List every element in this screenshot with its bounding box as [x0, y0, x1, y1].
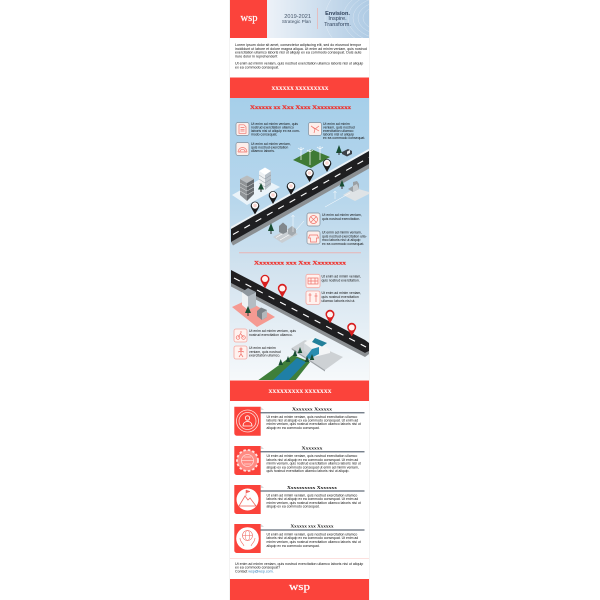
house on plate, right [340, 180, 369, 201]
section band 1 [230, 78, 369, 98]
callout: energy [307, 213, 362, 226]
tagline: Inspire. [328, 16, 347, 22]
callout: network: laboris nisi ut aliquip [323, 132, 354, 136]
item: process: Ut enim ad minim veniam, quis nostrud exercitation ullamco [266, 454, 357, 458]
callout: walking: veniam, quis nostrud [249, 350, 281, 354]
callout: network: veniam, quis nostrud [323, 126, 355, 130]
item: global [234, 524, 364, 553]
intro text: incididunt ut labore et dolore magna aliqua. Ut enim ad minim veniam, quis nostrud [235, 47, 367, 51]
icon: mountain flag [234, 485, 264, 514]
grey tower [240, 176, 254, 201]
section band 2 [230, 380, 369, 401]
footer text [235, 562, 363, 573]
logo panel [230, 0, 267, 38]
callout: document [236, 122, 300, 136]
callout: signs: Ut enim ad minim veniam, [322, 291, 361, 295]
item: people [234, 406, 364, 436]
callout: cycling: Ut enim ad minim veniam, quis [249, 329, 296, 333]
callout: dome [236, 142, 291, 156]
map pins: road one [251, 159, 331, 214]
item: people: aliquip ex ea commodo consequat. [266, 426, 320, 430]
tagline: Envision. [325, 11, 350, 17]
item: global: Ut enim ad minim veniam, quis nostrud exercitation ullamco [266, 532, 357, 536]
item: process: minim veniam, quis nostrud exercitation ullamco laboris nisi ut [266, 461, 361, 465]
infographic page [229, 0, 370, 600]
tree and small building [336, 145, 352, 156]
callout: grid: quis nostrud exercitation. [322, 278, 360, 282]
intro text [235, 43, 367, 69]
callout: grid: Ut enim ad minim veniam, [322, 275, 361, 279]
callout: document: Ut enim ad minim veniam, quis [251, 122, 298, 126]
item: process: quis nostrud exercitation ullamco laboris nisi ut aliquip. [266, 469, 349, 473]
callout: cycling: nostrud exercitation ullamco. [249, 333, 293, 337]
callout: document: laboris nisi ut aliquip ex ea com- [251, 129, 300, 133]
footer band with logo [230, 579, 369, 600]
item: global: aliquip ex ea commodo consequat. [266, 544, 320, 548]
heading: section one: Xxxxxx xx Xxx Xxxx Xxxxxxxxxxx [250, 105, 351, 111]
tower and house on pink plate [232, 288, 275, 327]
item: goals: minim veniam, quis nostrud exercitation ullamco laboris nisi ut [266, 501, 361, 505]
item: process [234, 446, 364, 475]
callout: walking: exercitation ullamco. [249, 354, 280, 358]
map panel background [230, 98, 369, 380]
callout: dome: Ut enim ad minim veniam, [251, 142, 291, 146]
callout: signs: quis nostrud exercitation [322, 295, 359, 299]
callout: network: ex ea commodo consequat. [323, 136, 365, 140]
plan title [282, 14, 311, 24]
header banner [230, 0, 369, 38]
logo panel: wsp [240, 13, 258, 24]
icon: hands and globe [234, 524, 264, 553]
item: goals: Ut enim ad minim veniam, quis nostrud exercitation ullamco [266, 493, 357, 497]
city towers [232, 168, 280, 205]
section band 1: XXXXXX XXXXXXXXX [272, 86, 329, 92]
callout: workshop: ex ea commodo consequat. [322, 242, 364, 246]
item: goals: aliquip ex ea commodo consequat. [266, 504, 320, 508]
footer text: Ut enim ad minim veniam, quis nostrud exercitation ullamco laboris nisi ut aliquip [235, 562, 363, 566]
item: global: laboris nisi ut aliquip ex ea commodo consequat. Ut enim ad [266, 536, 358, 540]
plan title: 2019-2021 [284, 14, 311, 20]
intro text: irure dolor in reprehenderit [235, 54, 277, 58]
callout: walking: Ut enim ad minim [249, 346, 276, 350]
callout: signs [306, 291, 361, 304]
item: goals [234, 485, 364, 514]
intro text: Lorem ipsum dolor sit amet, consectetur adipiscing elit, sed do eiusmod tempor [235, 43, 362, 47]
road one [231, 149, 369, 246]
callout: workshop [307, 231, 367, 246]
intro text: Ut enim ad minim veniam, quis nostrud exercitation ullamco laboris nisi ut aliquip [235, 62, 363, 66]
callout: cycling [234, 329, 296, 342]
callout: network [308, 122, 365, 140]
callout: workshop: quis nostrud exercitation ulla- [322, 234, 367, 238]
callout: dome: ullamco laboris. [251, 149, 275, 153]
item: process: laboris nisi ut aliquip ex ea commodo consequat. Ut enim ad [266, 458, 358, 462]
road two [231, 270, 369, 357]
tagline: Transform. [324, 22, 351, 28]
footer text: ex ea commodo consequat? [235, 566, 280, 570]
dam and canal [257, 337, 343, 381]
item: global: Xxxxxx xxx Xxxxxx [290, 524, 334, 529]
footer band with logo: wsp [289, 582, 310, 593]
intro text: exercitation ullamco laboris nisi ut aliquip ex ea commodo consequat. Duis aute [235, 51, 361, 55]
callout: energy: quis nostrud exercitation. [322, 217, 360, 221]
callout: document: nostrud exercitation ullamco [251, 126, 294, 130]
map pins: road two [260, 275, 356, 336]
plan title: Strategic Plan [282, 19, 311, 24]
intro text: ex ea commodo consequat. [235, 65, 279, 69]
houses on plate, lower [268, 222, 298, 243]
item: people: minim veniam, quis nostrud exercitation ullamco laboris nisi ut [266, 422, 361, 426]
item: goals: laboris nisi ut aliquip ex ea commodo consequat. Ut enim ad [266, 497, 358, 501]
item: goals: Xxxxxxxxxx Xxxxxxx [287, 485, 338, 490]
item: global: minim veniam, quis nostrud exercitation ullamco laboris nisi ut [266, 540, 361, 544]
callout: signs: ullamco laboris nisi ut. [322, 299, 355, 303]
item: process: aliquip ex ea commodo consequat ut enim ad minim veniam, [266, 465, 359, 469]
callout: energy: Ut enim ad minim veniam, [322, 213, 362, 217]
item: process: Xxxxxxx [302, 446, 324, 451]
callout: workshop: mco laboris nisi ut aliquip [322, 238, 360, 242]
white tower [259, 168, 271, 190]
icon: gear [234, 446, 264, 475]
section band 2: XXXXXXXXX XXXXXXX [268, 389, 332, 395]
arrows: connections [292, 191, 350, 232]
callout: grid [306, 274, 361, 288]
item: people: laboris nisi ut aliquip ex ea commodo consequat. Ut enim ad [266, 418, 358, 422]
tree [258, 183, 264, 192]
heading: section two: Xxxxxxxx xxx Xxx Xxxxxxxxx [254, 260, 346, 266]
footer text: Contact wsp@wsp.com. [235, 569, 274, 573]
item: people: Xxxxxxx Xxxxxx [292, 406, 333, 412]
icon: person badge [234, 407, 264, 436]
callout: document: modo consequat. [251, 132, 277, 136]
item: people: Ut enim ad minim veniam, quis nostrud exercitation ullamco [266, 415, 357, 419]
wind farm [293, 146, 330, 168]
tagline [324, 11, 351, 28]
callout: network: Ut enim ad minim [323, 122, 350, 126]
callout: workshop: Ut enim ad minim veniam, [322, 231, 362, 235]
callout: dome: quis nostrud exercitation [251, 146, 288, 150]
callout: network: exercitation ullamco [323, 129, 353, 133]
callout: walking [234, 346, 281, 359]
